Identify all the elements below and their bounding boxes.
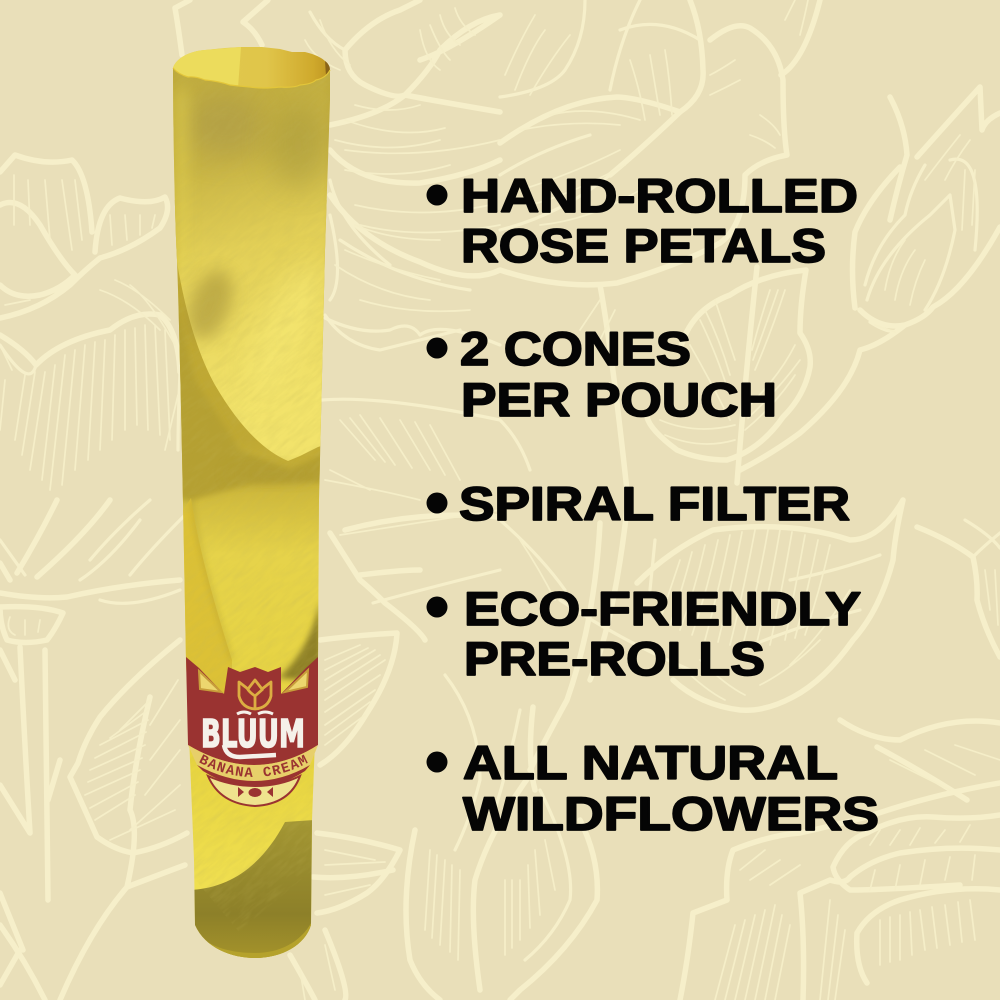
- line art: lower center tulip bud: [406, 675, 597, 1000]
- line art: lower left stems and leaves: [0, 500, 187, 1000]
- band seal: [208, 776, 300, 806]
- cone body: [173, 69, 330, 958]
- feature: 2 cones per pouch: [426, 322, 777, 426]
- band ribbon text: BANANA CREAM: [199, 754, 308, 777]
- line art: bottom right rose: [680, 720, 1000, 1000]
- overlapping upper petal: [173, 69, 330, 461]
- feature: hand-rolled rose petals: HAND-ROLLED: [461, 169, 858, 222]
- band red body: [186, 657, 318, 765]
- feature: eco-friendly pre-rolls: PRE-ROLLS: [464, 632, 765, 685]
- feature: eco-friendly pre-rolls: ECO-FRIENDLY: [464, 582, 861, 635]
- line art: lower right large leaf: [330, 500, 903, 770]
- brand wordmark: [201, 712, 305, 757]
- feature list: [426, 169, 879, 840]
- line art: right rose bud: [740, 87, 1000, 470]
- cone lower left shadow: [178, 312, 320, 502]
- product: rolled rose petal cone: [172, 47, 330, 958]
- cone front rim edge: [173, 68, 330, 88]
- band gold triangles: [199, 670, 308, 692]
- band gold ribbon: [188, 745, 318, 781]
- right shadow above band: [281, 603, 318, 683]
- feature: 2 cones per pouch: PER POUCH: [461, 373, 777, 426]
- line art: leaves right of cone: [290, 633, 400, 1000]
- feature: hand-rolled rose petals: ROSE PETALS: [461, 219, 826, 272]
- line art: center right leaf: [647, 267, 810, 483]
- feature: 2 cones per pouch: 2 CONES: [460, 322, 691, 375]
- line art: top center rose: [175, 0, 820, 500]
- feature: all natural wildflowers: ALL NATURAL: [463, 736, 838, 789]
- line art: left rose: [0, 155, 180, 490]
- feature: eco-friendly pre-rolls: [426, 582, 861, 685]
- brand wordmark: BLUUM: [201, 712, 305, 756]
- label band: [186, 657, 318, 807]
- cone inner rim: [173, 47, 330, 90]
- feature: spiral filter: SPIRAL FILTER: [459, 477, 850, 530]
- line art: right of cone upper petals: [322, 140, 530, 500]
- band tulip icon: [239, 680, 271, 709]
- line art: mid left large petals: [0, 345, 180, 450]
- lower left petal strip: [183, 498, 232, 700]
- feature: hand-rolled rose petals: [426, 169, 858, 272]
- band red line under ribbon: [197, 765, 310, 788]
- cone paper texture: [200, 319, 305, 873]
- feature: all natural wildflowers: [426, 736, 879, 840]
- line art: right edge bud: [917, 520, 1000, 657]
- cone dark wrapped section: [194, 820, 312, 958]
- feature: all natural wildflowers: WILDFLOWERS: [463, 787, 879, 840]
